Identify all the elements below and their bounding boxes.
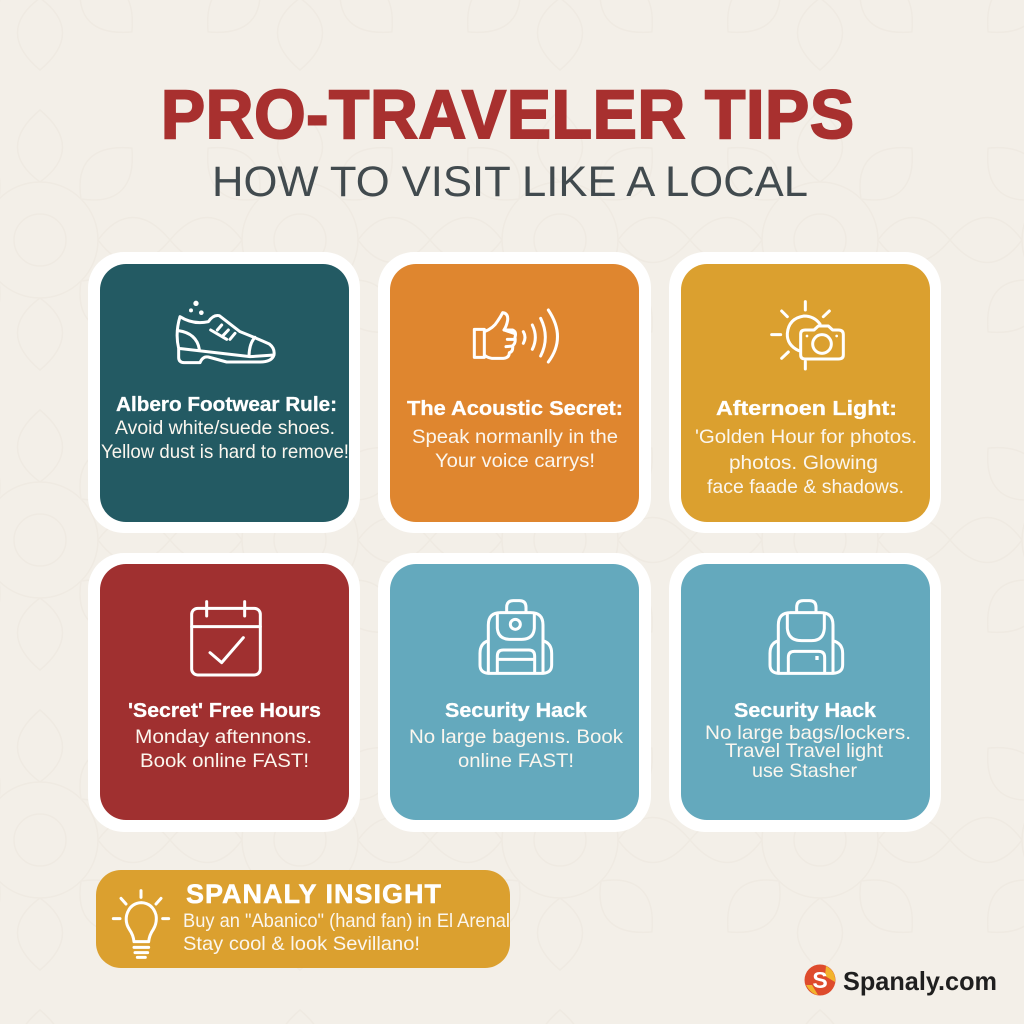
text block: Stay cool & look Sevillano! bbox=[183, 933, 420, 955]
subtitle: HOW TO VISIT LIKE A LOCAL bbox=[212, 158, 808, 206]
text block bbox=[101, 417, 349, 463]
panel: Secret Free Hours bbox=[88, 553, 360, 832]
icon: backpack with side pocket bbox=[770, 601, 843, 673]
heading: 'Secret' Free Hours bbox=[128, 699, 321, 722]
text block: 'Golden Hour for photos. bbox=[695, 426, 917, 448]
heading: Afternoen Light: bbox=[716, 397, 897, 420]
panel: Security Hack 1 bbox=[378, 553, 651, 832]
text block bbox=[695, 426, 917, 498]
panel: Afternoon Light bbox=[669, 252, 941, 533]
logo: Spanaly.com bbox=[804, 964, 997, 996]
text block bbox=[135, 726, 312, 772]
text block: Buy an "Abanico" (hand fan) in El Arenal bbox=[183, 910, 510, 932]
icon: shoe bbox=[177, 301, 274, 363]
text block bbox=[705, 722, 911, 782]
text block: Speak normanlly in the bbox=[412, 426, 618, 448]
text block: Your voice carrys! bbox=[435, 450, 595, 472]
text block: face faade & shadows. bbox=[707, 476, 904, 498]
heading: Security Hack bbox=[734, 699, 877, 722]
callout: Spanaly Insight bbox=[96, 870, 510, 968]
icon: S badge: S bbox=[812, 967, 828, 993]
logo text: Spanaly.com bbox=[843, 966, 997, 996]
panel: Albero Footwear Rule bbox=[88, 252, 360, 533]
icon: S badge bbox=[804, 964, 836, 996]
icon: sun and camera bbox=[772, 302, 843, 369]
text block: No large bagenıs. Book bbox=[409, 726, 623, 748]
heading: SPANALY INSIGHT bbox=[186, 879, 442, 909]
title: PRO-TRAVELER TIPS bbox=[161, 77, 854, 153]
text block: photos. Glowing bbox=[729, 452, 878, 474]
text block: Avoid white/suede shoes. bbox=[115, 417, 335, 439]
heading: Albero Footwear Rule: bbox=[116, 393, 337, 416]
text block bbox=[409, 726, 623, 772]
icon: light bulb bbox=[113, 891, 169, 957]
heading: The Acoustic Secret: bbox=[407, 397, 623, 420]
text block: Monday aftennons. bbox=[135, 726, 312, 748]
heading: Security Hack bbox=[445, 699, 588, 722]
icon: backpack with round pocket bbox=[480, 601, 552, 673]
text block: use Stasher bbox=[752, 760, 858, 782]
text block: Yellow dust is hard to remove! bbox=[101, 441, 349, 463]
text block: Book online FAST! bbox=[140, 750, 309, 772]
icon: calendar with check bbox=[192, 602, 260, 675]
panel: Security Hack 2 bbox=[669, 553, 941, 832]
panel: The Acoustic Secret bbox=[378, 252, 651, 533]
icon: thumbs up with sound waves bbox=[474, 310, 557, 362]
text block bbox=[183, 910, 510, 955]
text block bbox=[412, 426, 618, 472]
text block: online FAST! bbox=[458, 750, 574, 772]
text block: Travel Travel light bbox=[725, 740, 884, 762]
text block: No large bags/lockers. bbox=[705, 722, 911, 744]
